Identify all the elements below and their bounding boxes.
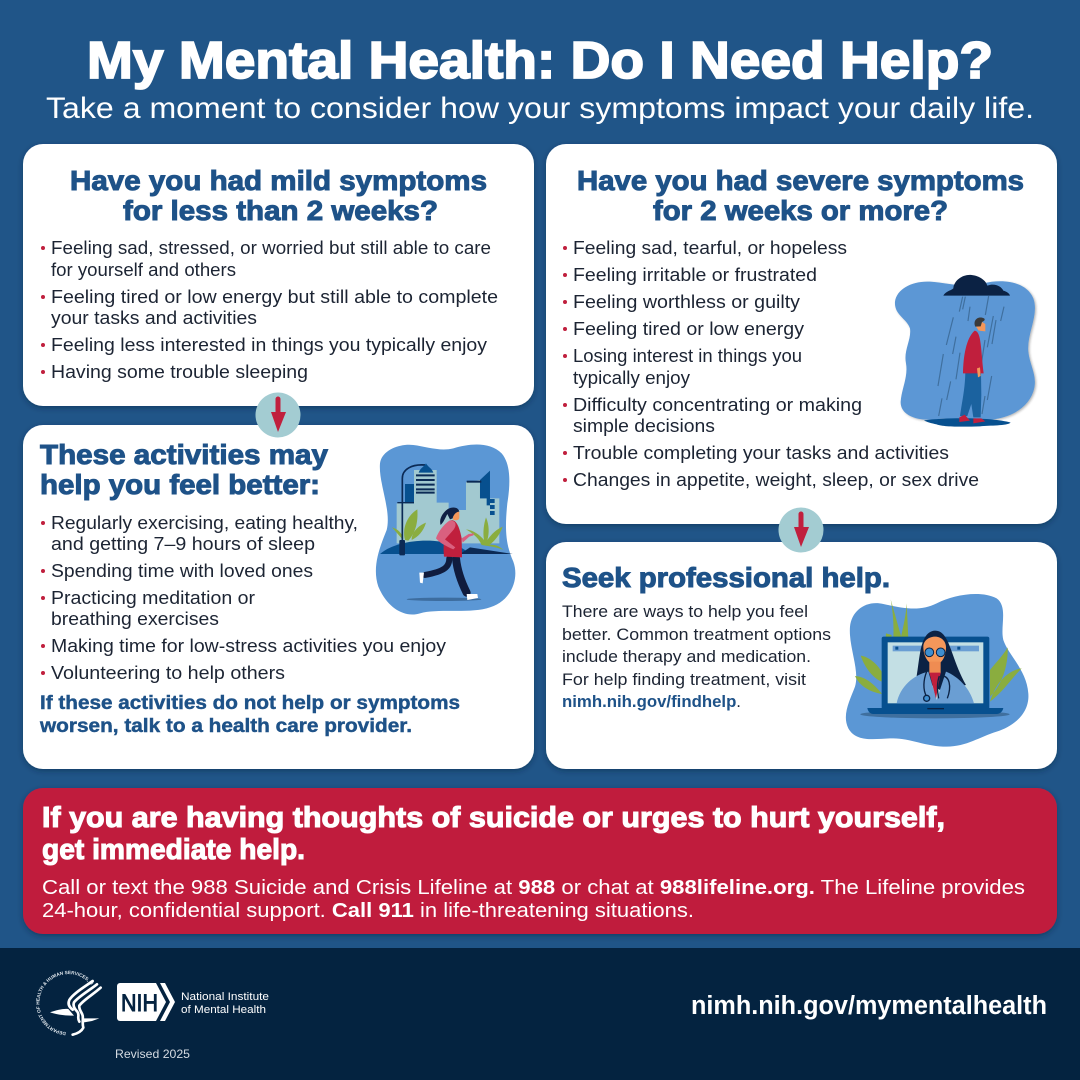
heading: mild symptoms: for less than 2 weeks? [123, 195, 438, 226]
arrow: severe to professional help [778, 508, 824, 552]
list: severe symptoms: Feeling sad, tearful, or hopeless [573, 237, 847, 258]
list: activities: Spending time with loved ones [51, 560, 313, 581]
illustration: man under rain cloud [895, 275, 1035, 427]
list: severe symptoms: Feeling worthless or guilty [573, 291, 801, 312]
icon: eagle [50, 981, 101, 1035]
heading: severe symptoms [577, 165, 1024, 226]
heading: activities: These activities may [40, 439, 329, 470]
text: National Institute of Mental Health: National Institute [181, 991, 269, 1003]
text: lifeline details: 24-hour, confidential support. Call 911 in life-threatening situations. [42, 899, 694, 922]
illustration: doctor on laptop [846, 594, 1028, 747]
callout: talk to a provider: If these activities do not help or symptoms [40, 693, 460, 714]
logo: HHS seal: DEPARTMENT OF HEALTH & HUMAN SERVICES, USA [36, 970, 94, 1036]
heading: severe symptoms: for 2 weeks or more? [653, 195, 948, 226]
text: treatment options: There are ways to help you feel [562, 602, 808, 621]
text: website URL: nimh.nih.gov/mymentalhealth [691, 992, 1047, 1020]
list: severe symptoms: simple decisions [573, 415, 715, 436]
list: severe symptoms: Feeling tired or low energy [573, 318, 805, 339]
text: treatment options [562, 602, 831, 711]
heading: immediate help: get immediate help. [42, 834, 305, 866]
logo: NIH [117, 983, 175, 1021]
callout: talk to a provider: worsen, talk to a health care provider. [39, 716, 412, 737]
list: mild symptoms [41, 237, 498, 382]
text: lifeline details: Call or text the 988 Suicide and Crisis Lifeline at 988 or chat at 988lifeline.org. The Lifeline provides [42, 876, 1025, 899]
callout: talk to a provider [39, 693, 460, 737]
heading: immediate help: If you are having thoughts of suicide or urges to hurt yourself, [42, 802, 945, 834]
logo: HHS seal [36, 970, 102, 1036]
text: revised date: Revised 2025 [115, 1047, 190, 1061]
list: severe symptoms: typically enjoy [573, 367, 691, 388]
list: mild symptoms: for yourself and others [51, 259, 236, 280]
subtitle: Take a moment to consider how your symptoms impact your daily life. [46, 92, 1034, 125]
list: severe symptoms: Losing interest in things you [573, 345, 802, 366]
panel: professional help [546, 542, 1057, 769]
panel: mild symptoms [23, 144, 534, 406]
heading: activities [40, 439, 329, 500]
heading: immediate help [42, 802, 945, 866]
heading: mild symptoms [70, 165, 487, 226]
text: treatment options: For help finding treatment, visit [562, 670, 806, 689]
list: activities: Regularly exercising, eating healthy, [51, 512, 358, 533]
list: activities: and getting 7–9 hours of sleep [51, 533, 315, 554]
list: mild symptoms: your tasks and activities [51, 307, 257, 328]
arrow: mild to activities [256, 392, 300, 438]
illustration: runner in city [376, 445, 515, 614]
heading: seek professional help: Seek professional help. [562, 562, 890, 593]
title: My Mental Health: Do I Need Help? [87, 32, 993, 90]
panel: crisis help [23, 788, 1057, 934]
list: mild symptoms: Feeling less interested in things you typically enjoy [51, 334, 488, 355]
text: National Institute of Mental Health [181, 991, 269, 1016]
text: treatment options: better. Common treatment options [562, 625, 831, 644]
list: mild symptoms: Feeling sad, stressed, or worried but still able to care [51, 237, 491, 258]
list: activities [41, 512, 447, 683]
list: mild symptoms: Feeling tired or low energy but still able to complete [51, 286, 498, 307]
list: mild symptoms: Having some trouble sleeping [51, 361, 308, 382]
list: activities: Volunteering to help others [51, 662, 285, 683]
list: activities: breathing exercises [51, 608, 219, 629]
heading: mild symptoms: Have you had mild symptoms [70, 165, 487, 196]
text: treatment options: nimh.nih.gov/findhelp. [562, 692, 741, 711]
list: activities: Making time for low-stress activities you enjoy [51, 635, 447, 656]
heading: severe symptoms: Have you had severe symptoms [577, 165, 1024, 196]
panel: activities [23, 425, 534, 769]
list: severe symptoms: Feeling irritable or frustrated [573, 264, 817, 285]
logo: NIH: NIH [121, 990, 158, 1017]
panel: severe symptoms [546, 144, 1057, 524]
text: lifeline details [42, 876, 1025, 922]
list: activities: Practicing meditation or [51, 587, 255, 608]
text: treatment options: include therapy and medication. [562, 647, 811, 666]
list: severe symptoms: Trouble completing your tasks and activities [573, 442, 949, 463]
text: National Institute of Mental Health: of Mental Health [181, 1004, 266, 1016]
list: severe symptoms: Changes in appetite, weight, sleep, or sex drive [573, 469, 979, 490]
heading: activities: help you feel better: [40, 469, 320, 500]
list: severe symptoms [563, 237, 979, 490]
list: severe symptoms: Difficulty concentrating or making [573, 394, 862, 415]
